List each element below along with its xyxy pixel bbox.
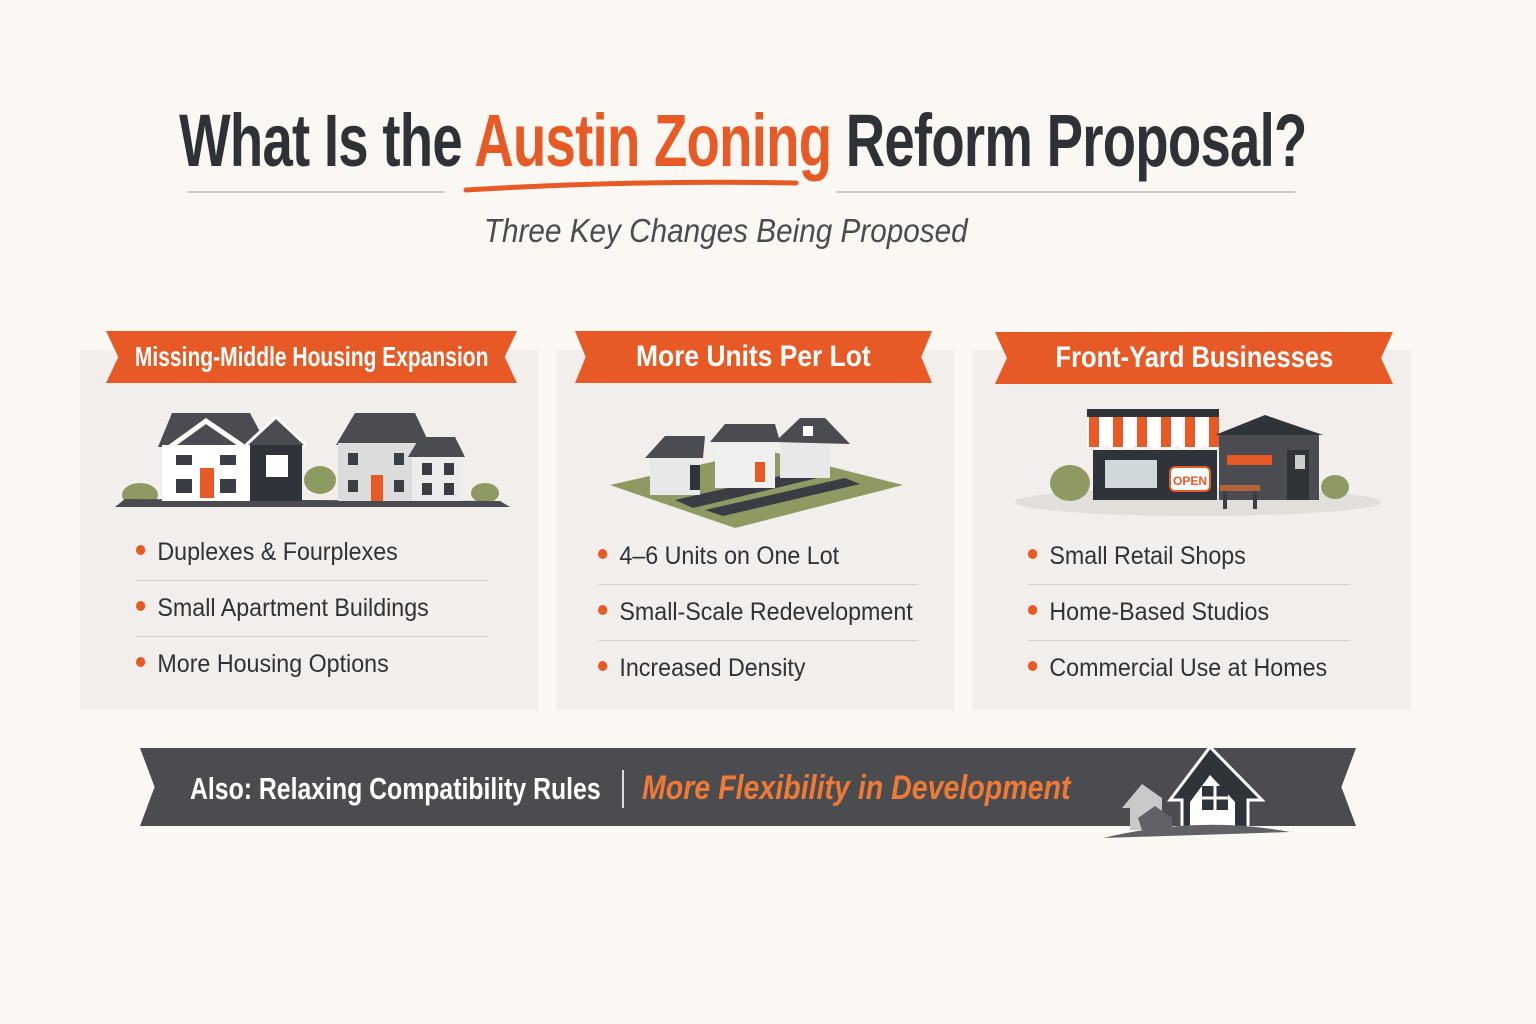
bullets: Duplexes & Fourplexes [157,538,398,566]
bullets [598,542,918,682]
bullets: More Housing Options [157,650,389,678]
panel: missing-middle [80,350,538,710]
panel: front-yard businesses [972,350,1411,710]
icon: storefront [1015,409,1381,516]
ribbon 3: Front-Yard Businesses [1055,341,1333,374]
panel: more units [556,350,954,710]
bullets [1028,542,1350,682]
icon: lot with houses [610,418,903,528]
banner text: Also: Relaxing Compatibility Rules [190,771,601,806]
icon: storefront: OPEN [1173,474,1207,488]
bullets: Small Retail Shops [1049,542,1246,570]
ribbon 1 [106,331,517,383]
subtitle: Three Key Changes Being Proposed [484,212,968,249]
ribbon 3 [995,332,1393,384]
ribbon 1: Missing-Middle Housing Expansion [135,341,488,372]
icon: houses on hill [1103,745,1290,838]
icon: houses [115,413,510,507]
ribbon 2: More Units Per Lot [636,340,871,373]
bullets: Increased Density [619,654,805,682]
title: What Is the Austin Zoning Reform Proposal? [179,99,1307,182]
ribbon 2 [575,331,932,383]
separator [622,770,624,808]
bullets: 4–6 Units on One Lot [619,542,839,570]
bullets: Home-Based Studios [1049,598,1269,626]
bullets: Commercial Use at Homes [1049,654,1327,682]
bullets: Small Apartment Buildings [157,594,429,622]
title underline [187,180,1295,193]
banner highlight text: More Flexibility in Development [642,769,1070,807]
bottom banner [140,748,1356,826]
bullets: Small-Scale Redevelopment [619,598,913,626]
bullets [136,538,488,678]
